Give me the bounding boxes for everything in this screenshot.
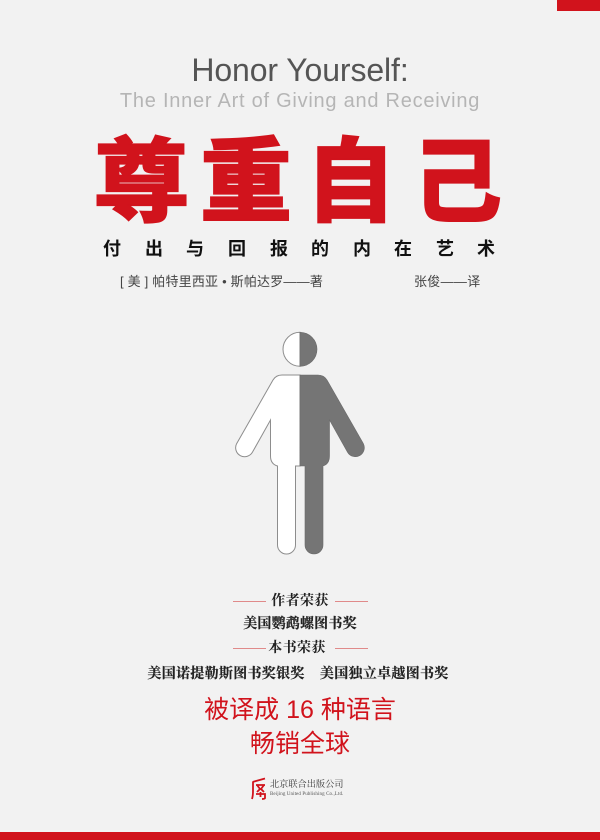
divider (233, 601, 266, 602)
english title: Honor Yourself: (191, 52, 409, 88)
chinese subtitle: 的 (311, 235, 329, 261)
icon: publisher seal (251, 778, 266, 800)
chinese subtitle: 回 (228, 235, 246, 261)
chinese subtitle: 与 (186, 235, 204, 261)
divider (233, 648, 266, 649)
chinese subtitle: 艺 (436, 235, 454, 261)
chinese subtitle (103, 235, 495, 261)
chinese main title: 尊 (93, 108, 190, 241)
author line: [ 美 ] 帕特里西亚 • 斯帕达罗——著 (120, 274, 323, 289)
award heading: author: 作者荣获 (271, 590, 329, 610)
chinese main title (93, 108, 502, 241)
icon: half white half grey human figure (235, 332, 365, 554)
chinese subtitle: 在 (394, 235, 412, 261)
award: author prize: 美国鹦鹉螺图书奖 (243, 613, 357, 633)
red slogan line two: 畅销全球 (250, 730, 350, 758)
chinese subtitle: 出 (145, 235, 163, 261)
icon: figure left white half (236, 332, 300, 554)
icon: figure right grey half (300, 332, 364, 554)
translator line: 张俊——译 (414, 274, 480, 289)
chinese subtitle: 内 (353, 235, 371, 261)
chinese main title: 己 (412, 108, 502, 241)
chinese subtitle: 报 (270, 235, 288, 261)
top red corner bar (557, 0, 600, 11)
publisher logo (251, 776, 344, 800)
chinese main title: 自 (306, 108, 395, 241)
bottom red bar (0, 832, 600, 840)
chinese main title: 重 (200, 108, 292, 241)
publisher english name: Beijing United Publishing Co.,Ltd. (270, 792, 343, 797)
chinese subtitle: 术 (477, 235, 495, 261)
red slogan line one: 被译成 16 种语言 (204, 696, 396, 724)
publisher name: 北京联合出版公司 (270, 776, 344, 790)
award: book prizes: 美国诺提勒斯图书奖银奖 美国独立卓越图书奖 (147, 663, 449, 683)
award heading: book: 本书荣获 (268, 637, 326, 657)
english subtitle: The Inner Art of Giving and Receiving (120, 90, 480, 112)
chinese subtitle: 付 (103, 235, 121, 261)
